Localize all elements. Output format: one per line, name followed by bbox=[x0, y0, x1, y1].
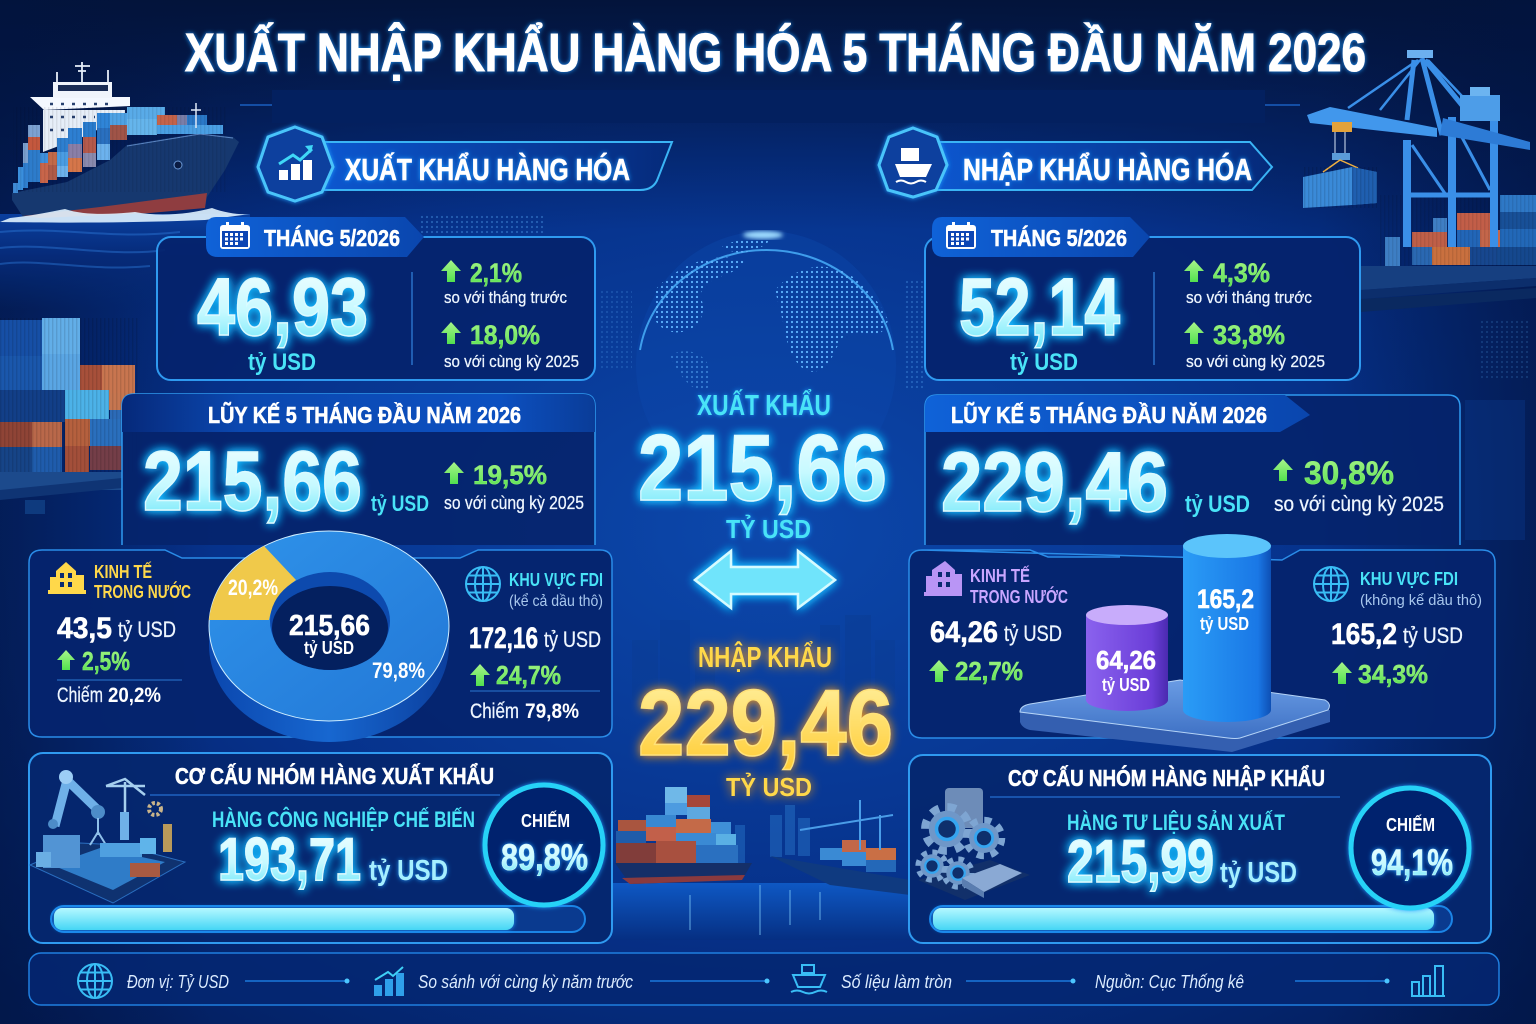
panel: import product structure bbox=[909, 755, 1491, 943]
superstructure bbox=[30, 62, 130, 152]
domestic label bbox=[970, 565, 1068, 607]
fdi value: 172,16 bbox=[469, 622, 538, 655]
fdi share: 79,8% bbox=[525, 700, 579, 723]
unit: tỷ USD bbox=[371, 491, 429, 516]
bar: domestic: 64,26 bbox=[1096, 645, 1156, 675]
bar: domestic bbox=[1086, 605, 1168, 711]
hoist bbox=[1335, 132, 1345, 155]
fdi share bbox=[470, 700, 579, 723]
band heading bbox=[122, 394, 595, 432]
change vs last year: so với cùng kỳ 2025 bbox=[1186, 352, 1325, 371]
domestic label: KINH TẾ bbox=[94, 561, 152, 582]
change vs last year bbox=[441, 320, 579, 371]
domestic label bbox=[94, 561, 191, 602]
share circle: CHIẾM bbox=[521, 810, 570, 831]
chart: export donut bbox=[209, 531, 449, 742]
fdi growth: 34,3% bbox=[1358, 659, 1428, 689]
illustration: dotted globe bbox=[636, 231, 896, 499]
month tab bbox=[932, 217, 1150, 257]
domestic growth bbox=[57, 646, 130, 676]
icon: fdi globe bbox=[1314, 567, 1348, 601]
fdi label: KHU VỰC FDI bbox=[1360, 569, 1458, 589]
unit: tỷ USD bbox=[369, 855, 448, 887]
bar: fdi: 165,2 bbox=[1197, 584, 1254, 614]
boom bbox=[1307, 107, 1437, 137]
fdi label: (không kể dầu thô) bbox=[1360, 592, 1482, 609]
domestic value bbox=[930, 616, 1062, 649]
hull bbox=[12, 133, 239, 217]
change bbox=[1273, 455, 1444, 516]
unit: tỷ USD bbox=[1185, 491, 1250, 518]
progress bar bbox=[930, 906, 1452, 932]
share circle bbox=[1351, 788, 1469, 908]
domestic label: TRONG NƯỚC bbox=[970, 586, 1068, 607]
header: import bbox=[879, 128, 1272, 197]
change: 19,5% bbox=[473, 460, 547, 490]
donut labels: 20,2% bbox=[228, 575, 278, 600]
center: import total: 229,46 bbox=[638, 670, 893, 775]
unit: tỷ USD bbox=[1010, 349, 1078, 376]
fdi value: tỷ USD bbox=[544, 627, 601, 652]
fdi label: (kể cả dầu thô) bbox=[509, 592, 603, 610]
unit: tỷ USD bbox=[1220, 857, 1297, 889]
note: comparison: So sánh với cùng kỳ năm trước bbox=[418, 972, 633, 992]
footer bar bbox=[29, 953, 1499, 1005]
domestic share: 20,2% bbox=[108, 684, 161, 707]
change vs previous month: so với tháng trước bbox=[1186, 288, 1312, 307]
icon: domestic building bbox=[924, 561, 962, 596]
foam bbox=[0, 208, 250, 223]
center: import total: TỶ USD bbox=[726, 772, 812, 802]
center: export total bbox=[638, 388, 887, 544]
illustration: port at night bbox=[612, 787, 910, 940]
cargo stacks bbox=[1361, 195, 1536, 312]
donut labels: tỷ USD bbox=[304, 638, 354, 658]
change vs previous month bbox=[1184, 258, 1312, 307]
value: 215,99 bbox=[1067, 828, 1214, 895]
donut labels: 215,66 bbox=[289, 610, 370, 642]
value: 46,93 bbox=[197, 262, 368, 353]
change vs last year: 18,0% bbox=[470, 320, 540, 350]
center: export total: 215,66 bbox=[638, 415, 887, 520]
illustration: city skyline bbox=[632, 615, 895, 700]
icon: fdi globe bbox=[466, 567, 500, 601]
icon: gears bbox=[918, 788, 1030, 900]
domestic share: Chiếm bbox=[57, 684, 103, 707]
share circle: 94,1% bbox=[1371, 842, 1453, 883]
crane frame bbox=[1348, 58, 1494, 247]
panel: import cumulative bbox=[925, 395, 1460, 545]
icon: bar chart bbox=[1411, 966, 1445, 996]
domestic growth bbox=[929, 656, 1023, 686]
icon: factory robot bbox=[30, 770, 185, 903]
share circle: CHIẾM bbox=[1386, 814, 1435, 835]
value: 193,71 bbox=[218, 826, 361, 893]
month tab: THÁNG 5/2026 bbox=[991, 224, 1127, 251]
fdi share: Chiếm bbox=[470, 700, 519, 723]
fdi label: KHU VỰC FDI bbox=[509, 570, 603, 590]
heading: CƠ CẤU NHÓM HÀNG NHẬP KHẨU bbox=[1008, 764, 1325, 791]
change vs previous month: 2,1% bbox=[470, 258, 522, 288]
arrow: two-way trade bbox=[695, 551, 835, 608]
containers bbox=[13, 103, 228, 193]
heading: XUẤT KHẨU HÀNG HÓA bbox=[345, 151, 630, 187]
domestic value bbox=[57, 612, 176, 645]
panel: export product structure bbox=[29, 753, 612, 943]
change: so với cùng kỳ 2025 bbox=[1274, 493, 1444, 516]
product label: HÀNG CÔNG NGHIỆP CHẾ BIẾN bbox=[212, 807, 475, 832]
band heading: LŨY KẾ 5 THÁNG ĐẦU NĂM 2026 bbox=[951, 401, 1267, 428]
share circle bbox=[485, 785, 603, 905]
sea bbox=[0, 214, 250, 309]
note: rounding: Số liệu làm tròn bbox=[841, 972, 952, 992]
icon: export chart hexagon bbox=[258, 127, 333, 201]
panel: export month bbox=[157, 217, 595, 380]
bar: fdi: tỷ USD bbox=[1200, 614, 1249, 634]
panel: import sectors bbox=[909, 550, 1495, 738]
panel: export sectors bbox=[29, 550, 612, 737]
icon: import ship hexagon bbox=[879, 128, 947, 197]
donut labels: 79,8% bbox=[372, 658, 425, 683]
note: unit: Đơn vị: Tỷ USD bbox=[127, 972, 229, 992]
change bbox=[444, 460, 584, 513]
icon: trend chart bbox=[374, 967, 404, 996]
change: 30,8% bbox=[1304, 455, 1394, 491]
chart: import cylinders bbox=[1020, 534, 1330, 752]
bar: fdi bbox=[1183, 534, 1271, 722]
center: export total: XUẤT KHẨU bbox=[697, 388, 831, 422]
illustration: left container stacks bbox=[0, 318, 140, 514]
fdi value bbox=[469, 622, 601, 655]
value: 52,14 bbox=[959, 262, 1120, 353]
change vs last year bbox=[1184, 320, 1325, 371]
value: 215,66 bbox=[143, 434, 362, 528]
domestic value: 64,26 bbox=[930, 616, 998, 649]
domestic label: TRONG NƯỚC bbox=[94, 581, 191, 602]
illustration: container ship bbox=[0, 62, 250, 309]
donut labels bbox=[228, 575, 425, 683]
domestic growth: 22,7% bbox=[955, 656, 1023, 686]
note: source: Nguồn: Cục Thống kê bbox=[1095, 972, 1244, 992]
band heading: LŨY KẾ 5 THÁNG ĐẦU NĂM 2026 bbox=[208, 401, 521, 428]
share circle: 89,8% bbox=[501, 837, 588, 878]
change: so với cùng kỳ 2025 bbox=[444, 493, 584, 513]
fdi growth bbox=[470, 660, 561, 690]
progress bar bbox=[51, 906, 585, 932]
illustration: port crane and stacks bbox=[1303, 50, 1536, 312]
band heading bbox=[925, 395, 1310, 432]
fdi label bbox=[1360, 569, 1482, 609]
panel: export cumulative bbox=[122, 394, 595, 545]
center: import total bbox=[638, 640, 893, 802]
fdi value bbox=[1331, 618, 1463, 651]
heading: NHẬP KHẨU HÀNG HÓA bbox=[963, 151, 1252, 187]
icon: domestic building bbox=[48, 562, 86, 594]
center: import total: NHẬP KHẨU bbox=[698, 640, 832, 674]
change vs previous month: 4,3% bbox=[1213, 258, 1270, 288]
fdi label bbox=[509, 570, 603, 610]
domestic value: tỷ USD bbox=[1004, 621, 1062, 646]
month tab bbox=[206, 217, 424, 257]
domestic share bbox=[57, 684, 161, 707]
value: 229,46 bbox=[941, 435, 1168, 529]
product label: HÀNG TƯ LIỆU SẢN XUẤT bbox=[1067, 810, 1285, 835]
platform bbox=[1020, 680, 1330, 752]
panel: import month bbox=[925, 217, 1360, 380]
icon: ship bbox=[791, 965, 827, 994]
domestic growth: 2,5% bbox=[82, 646, 130, 676]
icon: unit globe bbox=[78, 964, 112, 998]
change vs last year: so với cùng kỳ 2025 bbox=[444, 352, 579, 371]
hanging container bbox=[1303, 167, 1377, 208]
fdi value: tỷ USD bbox=[1403, 623, 1463, 648]
heading: CƠ CẤU NHÓM HÀNG XUẤT KHẨU bbox=[175, 762, 494, 789]
domestic value: 43,5 bbox=[57, 612, 112, 645]
bar: domestic: tỷ USD bbox=[1102, 675, 1150, 695]
center: export total: TỶ USD bbox=[726, 514, 811, 544]
domestic label: KINH TẾ bbox=[970, 565, 1030, 586]
change vs last year: 33,8% bbox=[1213, 320, 1285, 350]
fdi growth: 24,7% bbox=[496, 660, 561, 690]
fdi value: 165,2 bbox=[1331, 618, 1397, 651]
month tab: THÁNG 5/2026 bbox=[264, 224, 400, 251]
header: export bbox=[258, 127, 672, 201]
domestic value: tỷ USD bbox=[118, 617, 176, 642]
change vs previous month bbox=[441, 258, 567, 307]
change vs previous month: so với tháng trước bbox=[444, 288, 567, 307]
unit: tỷ USD bbox=[248, 349, 316, 376]
segment: domestic share bbox=[209, 546, 296, 620]
